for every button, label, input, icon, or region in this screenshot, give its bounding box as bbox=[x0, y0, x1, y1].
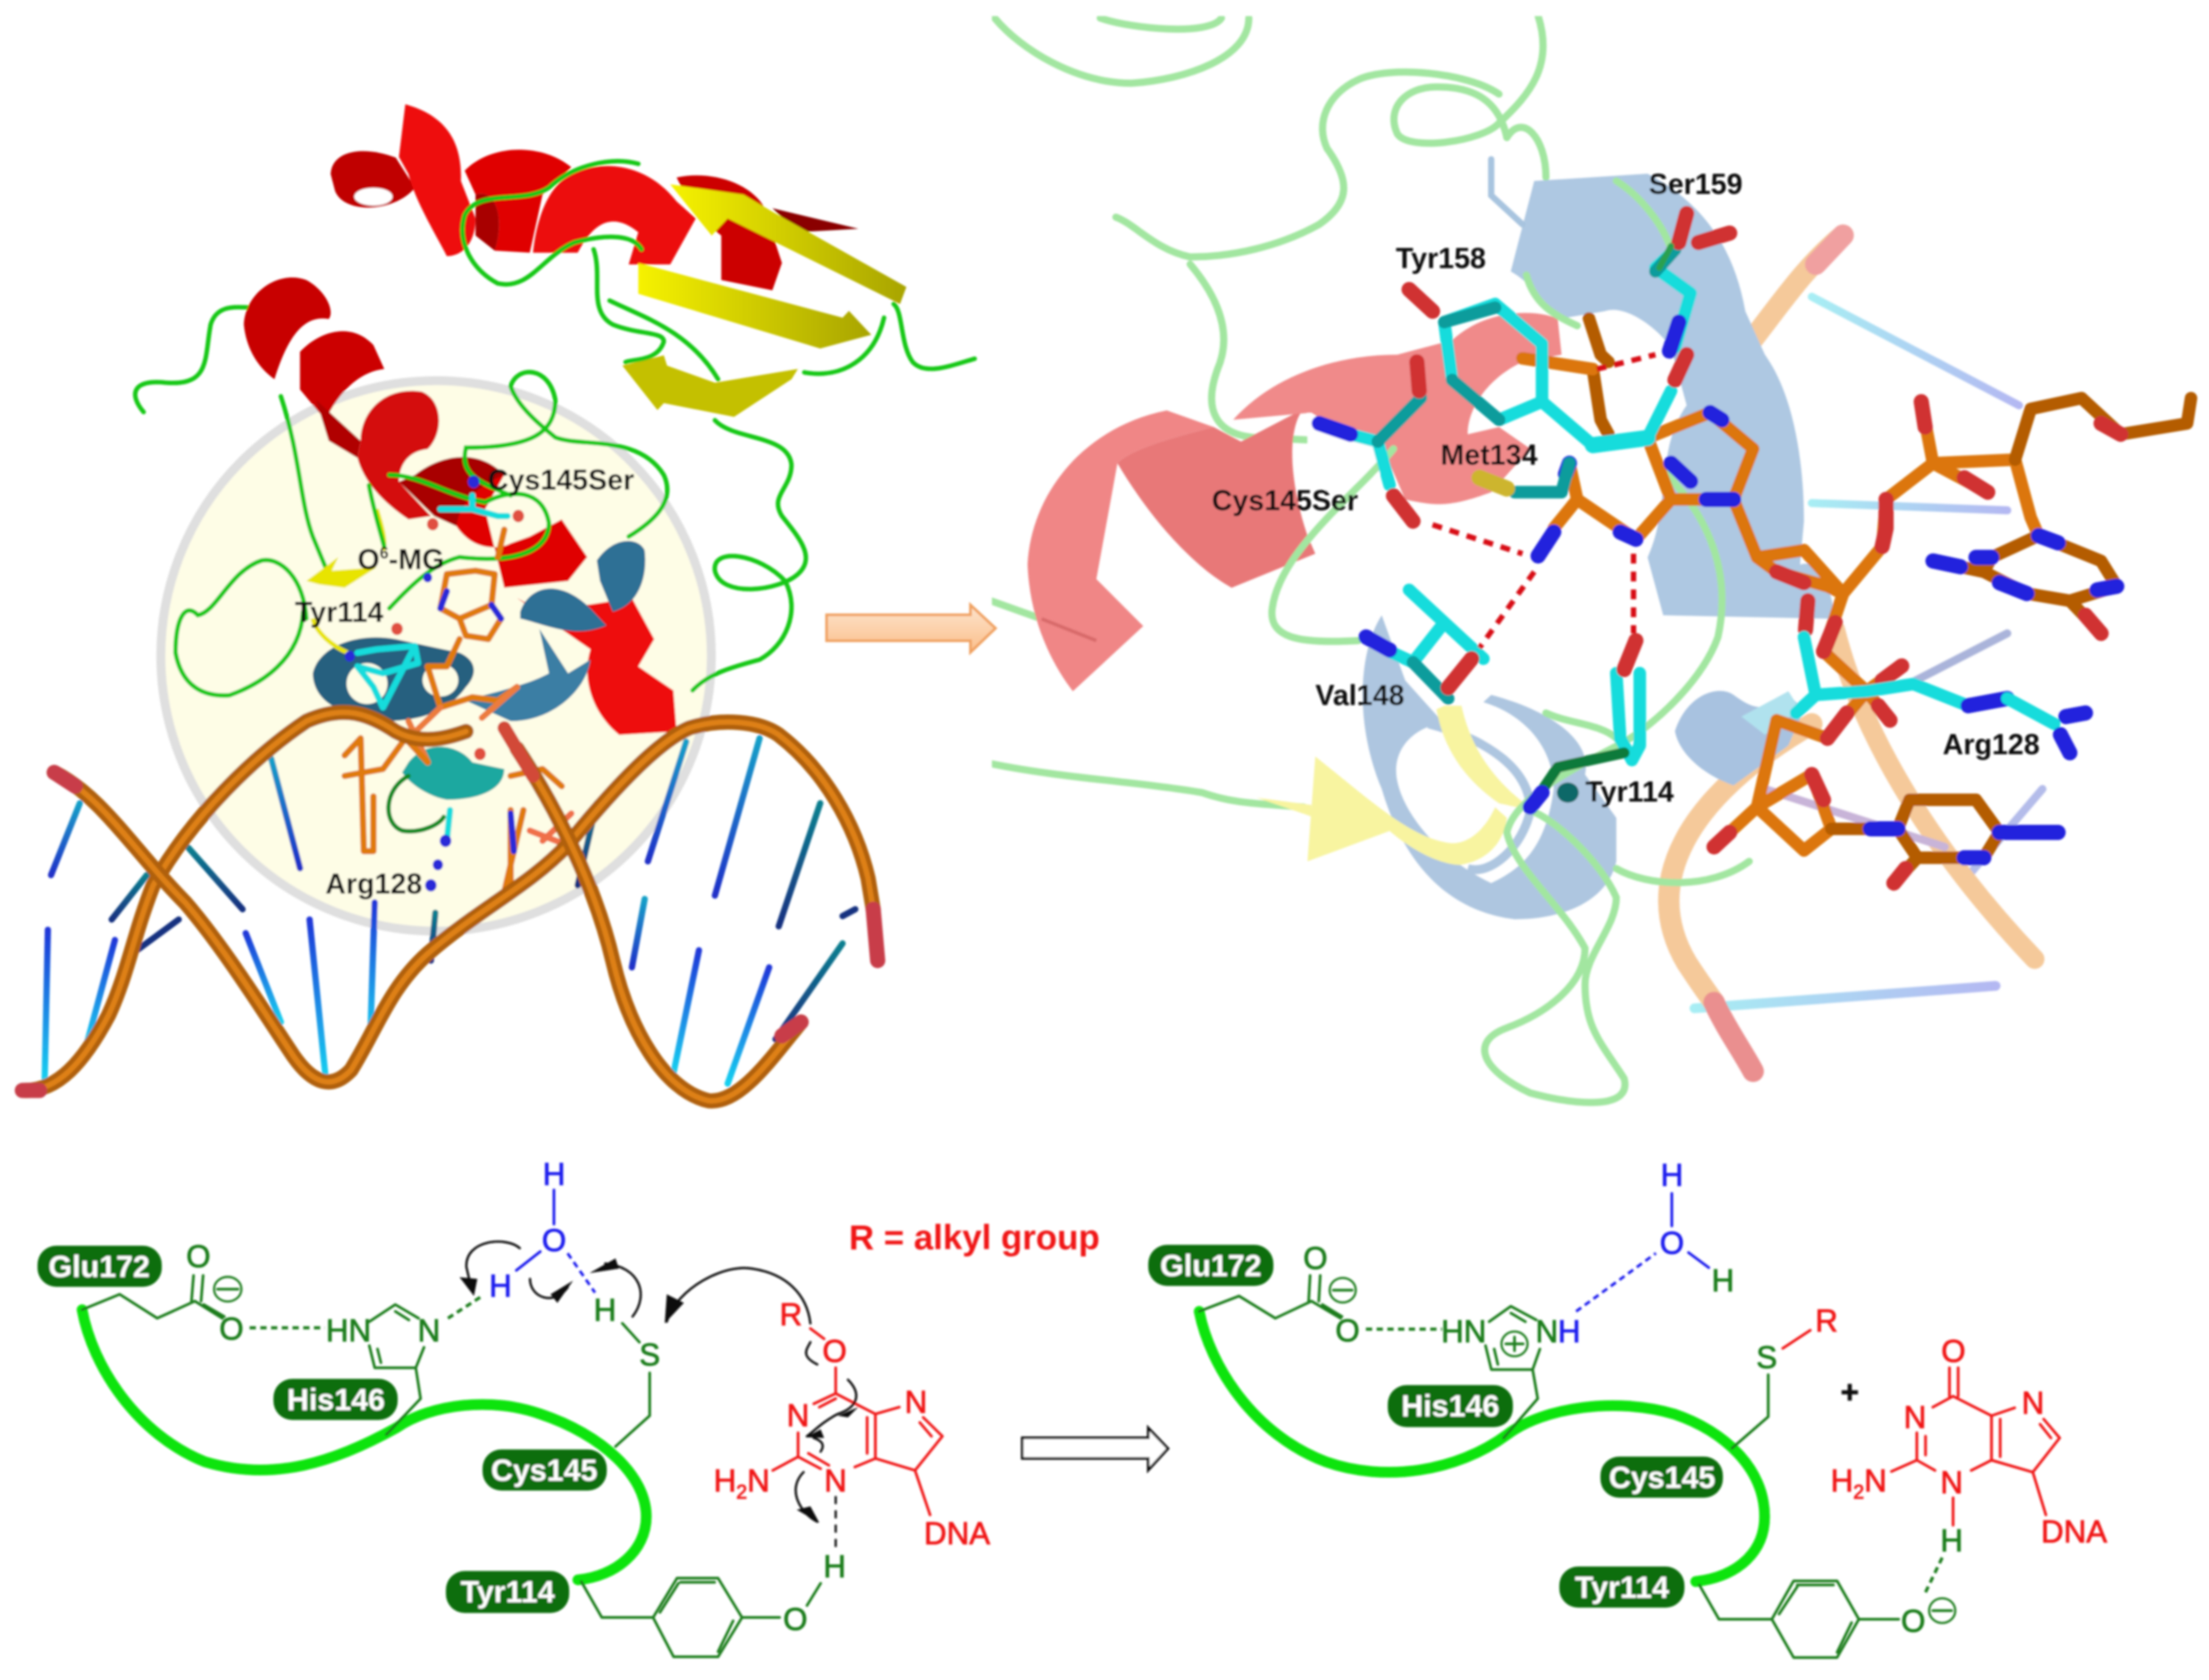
faded yellow strand bbox=[1256, 706, 1534, 865]
residue: Tyr114 bbox=[1530, 641, 1640, 807]
pill: Cys145: Cys145 bbox=[491, 1454, 598, 1488]
ligand: O6-methylguanine and DNA bbox=[1523, 318, 2191, 883]
atom labels: reactant: N bbox=[824, 1464, 847, 1499]
atom labels: product: H bbox=[1660, 1158, 1684, 1193]
atom labels: product: N bbox=[1940, 1466, 1963, 1500]
water bonds bbox=[1576, 1193, 1709, 1312]
label: O6-MG: O bbox=[357, 543, 380, 575]
labels: complex bbox=[295, 464, 634, 900]
residue: Tyr158 bbox=[1409, 290, 1648, 445]
atom labels: product: S bbox=[1756, 1340, 1777, 1375]
green loops inside circle bbox=[175, 372, 668, 831]
labels: close-up bbox=[1212, 168, 2039, 808]
active site sticks bbox=[345, 475, 571, 892]
pill: His146 bbox=[273, 1379, 398, 1420]
green side chains bbox=[82, 1275, 820, 1657]
atom labels: reactant: O bbox=[219, 1312, 244, 1347]
atom labels: product: H bbox=[1940, 1524, 1963, 1558]
curved electron arrows bbox=[459, 1241, 858, 1523]
hydrogen bonds bbox=[1432, 355, 1655, 648]
yellow strand in circle bbox=[307, 557, 376, 588]
blue helix bbox=[597, 541, 645, 612]
atom labels: product: H bbox=[1711, 1264, 1734, 1298]
atom labels: reactant bbox=[186, 1157, 991, 1637]
label: Cys145Ser: Cys145Ser bbox=[1212, 484, 1358, 517]
atom labels: reactant: O bbox=[186, 1239, 211, 1274]
atom labels: reactant: N bbox=[786, 1399, 810, 1433]
pill: Tyr114 bbox=[446, 1571, 569, 1613]
atom labels: product: HN bbox=[1441, 1315, 1486, 1349]
DNA backbone bbox=[22, 712, 878, 1101]
label: Cys145Ser: Cys145Ser bbox=[488, 464, 634, 496]
atom labels: product: O bbox=[1901, 1604, 1926, 1639]
panel: mechanism, product state bbox=[1148, 1158, 2108, 1658]
residue: Met134 bbox=[1480, 463, 1569, 492]
legend: R definition: R = alkyl group bbox=[849, 1219, 1100, 1257]
water bonds bbox=[517, 1190, 595, 1292]
atom labels: product: H bbox=[1558, 1315, 1581, 1349]
red helix upper bbox=[331, 151, 415, 207]
atom labels: reactant: N bbox=[417, 1314, 441, 1348]
pill: Cys145: Cys145 bbox=[1608, 1461, 1716, 1495]
label: Ser159: Ser159 bbox=[1649, 168, 1743, 200]
atom labels: product: O bbox=[1941, 1334, 1966, 1369]
pill: Glu172: Glu172 bbox=[48, 1250, 150, 1284]
atom labels: product: N bbox=[2021, 1386, 2045, 1421]
label: Arg128: Arg128 bbox=[1943, 728, 2039, 760]
label: O6-MG: 6 bbox=[380, 544, 389, 562]
pill: Tyr114 bbox=[1559, 1567, 1684, 1608]
pill: His146: His146 bbox=[287, 1383, 385, 1417]
atom labels: reactant: O bbox=[822, 1334, 847, 1369]
residue: Cys145Ser bbox=[1319, 362, 1421, 521]
pill: Glu172: Glu172 bbox=[1160, 1249, 1262, 1283]
atom labels: product: O bbox=[1303, 1241, 1328, 1276]
atom labels: reactant: HN bbox=[326, 1314, 371, 1348]
faded green loops bbox=[991, 16, 1546, 807]
label: Met134: Met134 bbox=[1440, 439, 1538, 471]
residue pills bbox=[38, 1246, 607, 1613]
DNA bases bbox=[45, 738, 855, 1084]
faded red helix bbox=[1028, 313, 1562, 692]
atom labels: reactant: R bbox=[779, 1298, 802, 1332]
atom labels: reactant: H bbox=[823, 1550, 846, 1584]
atom labels: product: R bbox=[1815, 1304, 1838, 1339]
label: Val148: Val148 bbox=[1315, 679, 1405, 711]
panel: mechanism, reactant state bbox=[38, 1157, 991, 1657]
atom labels: product: N bbox=[1864, 1464, 1886, 1499]
atom labels: reactant: N bbox=[747, 1464, 769, 1499]
guanine bonds bbox=[1783, 1331, 2060, 1525]
atom labels: reactant: H bbox=[542, 1157, 566, 1192]
pill: Tyr114: Tyr114 bbox=[1575, 1571, 1669, 1605]
atom labels: product: DNA bbox=[2041, 1515, 2108, 1550]
highlight circle around active site bbox=[161, 381, 711, 931]
green side chains bbox=[1199, 1275, 1955, 1658]
faded blue helices bbox=[1363, 159, 1835, 920]
atom labels: reactant: 2 bbox=[736, 1481, 747, 1503]
red helix lower bbox=[244, 277, 331, 379]
atom labels: reactant: N bbox=[904, 1385, 928, 1420]
atom labels: reactant: H bbox=[714, 1464, 736, 1499]
residue: Arg128 bbox=[1796, 601, 2086, 752]
atom labels: product: N bbox=[1535, 1315, 1558, 1349]
blue and red atoms of nucleotides bbox=[1538, 413, 2117, 858]
pill: Glu172 bbox=[1148, 1245, 1273, 1286]
label: Tyr114: Tyr114 bbox=[295, 596, 383, 628]
arrow: orange zoom arrow bbox=[827, 605, 995, 652]
arrow: reaction arrow bbox=[1022, 1428, 1168, 1470]
atom labels: product: N bbox=[1903, 1400, 1927, 1435]
atom labels: reactant: DNA bbox=[924, 1516, 991, 1551]
yellow beta sheets bbox=[670, 184, 906, 304]
residue and ligand sticks bbox=[1319, 214, 2191, 883]
atom labels: reactant: H bbox=[593, 1293, 617, 1328]
atom labels: reactant: S bbox=[639, 1338, 660, 1373]
protein ribbons bbox=[135, 105, 975, 831]
label: Tyr158: Tyr158 bbox=[1396, 242, 1486, 274]
atom labels: product: O bbox=[1335, 1314, 1360, 1348]
pill: His146: His146 bbox=[1401, 1390, 1499, 1424]
faded DNA and bases bbox=[1669, 235, 2043, 1071]
residue: Val148 bbox=[1366, 590, 1483, 699]
green loops bbox=[135, 162, 975, 691]
atom labels: reactant: H bbox=[489, 1269, 512, 1304]
atom labels: reactant: O bbox=[783, 1602, 808, 1637]
protein backbone bbox=[82, 1310, 646, 1580]
atom labels: product: O bbox=[1659, 1226, 1684, 1261]
panel: whole protein-DNA complex bbox=[22, 105, 975, 1101]
label: Arg128: Arg128 bbox=[325, 868, 422, 900]
label: Tyr114: Tyr114 bbox=[1585, 776, 1674, 808]
pill: Tyr114: Tyr114 bbox=[460, 1575, 555, 1609]
pill: His146 bbox=[1388, 1385, 1513, 1427]
atom labels: product: 2 bbox=[1853, 1481, 1864, 1503]
atom labels: product bbox=[1303, 1158, 2108, 1639]
faded loops over ribbons bbox=[1272, 181, 1750, 1103]
residue: Ser159 bbox=[1648, 214, 1730, 438]
residue pills bbox=[1148, 1245, 1723, 1608]
atom labels: product: H bbox=[1831, 1464, 1853, 1499]
atom labels: reactant: O bbox=[542, 1223, 567, 1258]
pill: Glu172 bbox=[38, 1246, 162, 1287]
protein backbone bbox=[1199, 1312, 1765, 1582]
label: O6-MG: -MG bbox=[389, 543, 444, 575]
plus sign: + bbox=[1841, 1375, 1859, 1410]
O6-alkylguanine bonds bbox=[773, 1329, 943, 1550]
teal helix bbox=[402, 747, 504, 800]
panel: active site close-up bbox=[991, 16, 2191, 1103]
